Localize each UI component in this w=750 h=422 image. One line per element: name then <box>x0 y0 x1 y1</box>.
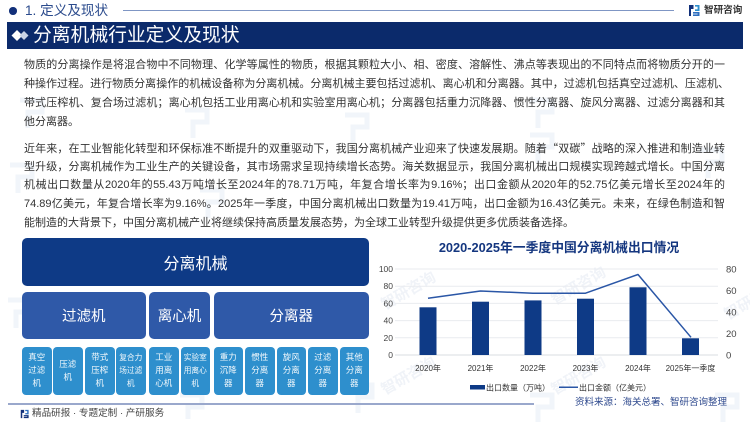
left axis labels: 40 <box>384 316 393 326</box>
text: 智研咨询 <box>378 353 439 398</box>
left axis labels: 80 <box>384 281 393 291</box>
leaf: 复合场过滤机: 复合力 <box>119 353 142 362</box>
logo: 智研咨询 <box>689 4 742 16</box>
leaf: 复合场过滤机: 机 <box>127 379 135 388</box>
leaf: 重力沉降器: 器 <box>224 378 232 388</box>
footer slogan <box>20 408 164 419</box>
header rule <box>123 10 674 11</box>
paragraph: definition: 他分离器。 <box>24 116 79 128</box>
paragraph: market status: 近年来，在工业智能化转型和环保标准不断提升的双重驱动下，我国分离机械产业迎来了快速发展期。随着“双碳”战略的深入推进和制造业转 <box>24 140 725 156</box>
footer rule <box>8 403 534 404</box>
legend: 出口数量（万吨） <box>486 382 550 392</box>
leaf: 带式压榨机: 压榨 <box>91 365 108 375</box>
leaf: 惯性分离器 <box>245 347 274 394</box>
leaf: 惯性分离器: 惯性 <box>251 352 268 362</box>
text: 智研咨询 <box>378 268 439 313</box>
section heading text: 1. 定义及现状 <box>25 3 108 18</box>
leaf: 其他分离器 <box>340 347 369 394</box>
leaf: 旋风分离器: 器 <box>287 378 296 388</box>
leaf: 工业用离心机: 用离 <box>155 365 172 375</box>
leaf: 其他分离器: 器 <box>350 378 358 388</box>
left axis labels: 60 <box>384 298 393 308</box>
leaf: 其他分离器: 分离 <box>346 365 363 375</box>
leaf: 过滤分离器: 器 <box>318 378 327 388</box>
line: 出口金额 <box>428 274 691 337</box>
leaf: 过滤分离器: 过滤 <box>314 352 331 362</box>
bullet <box>9 7 16 14</box>
node: 分离机械: 分离机械 <box>163 256 228 273</box>
icon: small logo <box>20 410 29 418</box>
leaf: 工业用离心机 <box>149 347 178 394</box>
leaf: 真空过滤机 <box>22 347 52 394</box>
left axis labels <box>379 264 393 360</box>
right axis labels: 40 <box>726 308 737 318</box>
x axis labels: 2022年 <box>520 363 546 373</box>
leaf: 过滤分离器: 分离 <box>314 365 331 375</box>
leaf: 旋风分离器: 分离 <box>283 365 300 375</box>
node: 离心机: 离心机 <box>158 309 201 325</box>
title banner <box>7 22 743 49</box>
x axis labels: 2025年一季度 <box>666 363 715 373</box>
paragraph: market status <box>24 140 725 229</box>
node: 过滤机: 过滤机 <box>62 309 106 325</box>
leaf: 其他分离器: 其他 <box>346 352 363 362</box>
x axis labels: 2021年 <box>468 363 493 373</box>
icon: logo mark <box>689 5 700 16</box>
leaf: 旋风分离器: 旋风 <box>283 352 300 362</box>
node: 过滤机 <box>22 292 146 339</box>
legend: 出口金额（亿美元） <box>579 382 651 392</box>
node: 分离器 <box>214 292 369 339</box>
leaf: 带式压榨机: 机 <box>95 378 104 388</box>
leaf: 工业用离心机: 心机 <box>155 378 172 388</box>
right axis labels: 80 <box>726 264 737 276</box>
leaf: 带式压榨机: 带式 <box>91 352 108 362</box>
leaf: 带式压榨机 <box>85 347 114 394</box>
leaf: 重力沉降器: 沉降 <box>220 365 237 375</box>
left axis labels: 20 <box>384 333 393 343</box>
node: 分离机械 <box>22 238 369 286</box>
bars: 出口数量 <box>420 287 699 355</box>
leaf: 压滤机: 压滤 <box>59 359 76 369</box>
leaf: 压滤机: 机 <box>63 372 72 382</box>
paragraph: market status: 型升级，分离机械作为工业生产的关键设备，其市场需求呈现持续增长态势。海关数据显示，我国分离机械出口规模实现跨越式增长。中国分离 <box>24 161 725 173</box>
node: 离心机 <box>149 292 210 339</box>
chart title: 2020-2025年一季度中国分离机械出口情况 <box>439 240 679 255</box>
leaf: 实验室用离心机: 机 <box>191 379 199 388</box>
leaf: 真空过滤机: 机 <box>32 378 41 388</box>
leaf: 复合场过滤机: 场过滤 <box>119 366 142 375</box>
left axis labels: 0 <box>388 350 393 360</box>
paragraph: definition: 物质的分离操作是将混合物中不同物理、化学等属性的物质，根据其颗粒大小、相、密度、溶解性、沸点等表现出的不同特点而将物质分开的一 <box>24 59 725 71</box>
leaf: 重力沉降器: 重力 <box>220 352 237 362</box>
source note: 资料来源：海关总署、智研咨询整理 <box>575 397 727 408</box>
right axis labels: 0 <box>726 350 731 362</box>
right axis labels: 60 <box>726 286 737 297</box>
leaf: 惯性分离器: 分离 <box>251 365 268 375</box>
leaf: 工业用离心机: 工业 <box>155 352 172 362</box>
x axis labels: 2024年 <box>625 363 651 373</box>
leaf: 实验室用离心机 <box>180 347 210 394</box>
paragraph: definition <box>24 58 729 128</box>
paragraph: market status: 74.89亿美元，年复合增长率为9.16%。2025年一季度，中国分离机械出口数量为19.41万吨，出口金额为16.43亿美元。未来，在绿色制造和智 <box>24 198 725 210</box>
slogan text: 精品研报 · 专题定制 · 产研服务 <box>32 408 164 419</box>
panel: classification tree <box>22 238 369 395</box>
paragraph: market status: 能制造的大背景下，中国分离机械产业将继续保持高质量发展态势，为全球工业转型升级提供更多优质装备选择。 <box>24 217 574 229</box>
leaf: 真空过滤机: 过滤 <box>28 365 45 375</box>
text: 智研咨询 <box>548 263 609 308</box>
right axis labels: 20 <box>726 329 737 340</box>
x axis labels: 2020年 <box>415 363 441 373</box>
title text: 分离机械行业定义及现状 <box>33 24 240 45</box>
section heading <box>9 3 108 18</box>
leaf: 复合场过滤机 <box>116 347 146 394</box>
paragraph: definition: 带式压榨机、复合场过滤机；离心机包括工业用离心机和实验室用离心机；分离器包括重力沉降器、惯性分离器、旋风分离器、过滤分离器和其 <box>24 96 725 108</box>
leaf: 惯性分离器: 器 <box>255 378 264 388</box>
right axis labels <box>726 264 737 362</box>
paragraph: definition: 种操作过程。进行物质分离操作的机械设备称为分离机械。分离机械主要包括过滤机、离心机和分离器。其中，过滤机包括真空过滤机、压滤机、 <box>24 78 729 90</box>
leaf: 旋风分离器 <box>276 347 306 394</box>
logo text: 智研咨询 <box>704 5 742 16</box>
leaf: 重力沉降器 <box>214 347 243 394</box>
leaf: 实验室用离心机: 用离心 <box>184 366 207 375</box>
x axis labels: 2023年 <box>573 363 598 373</box>
text: 智研咨询 <box>548 353 609 398</box>
paragraph: market status: 机械出口数量从2020年的55.43万吨增长至2024年的78.71万吨，年复合增长率为9.16%；出口金额从2020年的52.75亿美元增长至2024年的 <box>24 179 725 191</box>
left axis labels: 100 <box>379 264 393 274</box>
combo chart: export volume and value <box>379 264 737 392</box>
leaf: 过滤分离器 <box>308 347 338 394</box>
leaf: 真空过滤机: 真空 <box>28 352 45 362</box>
leaf: 压滤机 <box>53 347 82 394</box>
x axis labels <box>415 363 715 373</box>
legend <box>470 382 651 392</box>
icon: diamonds <box>12 30 28 41</box>
node: 分离器: 分离器 <box>270 309 313 325</box>
leaf: 实验室用离心机: 实验室 <box>184 353 207 362</box>
